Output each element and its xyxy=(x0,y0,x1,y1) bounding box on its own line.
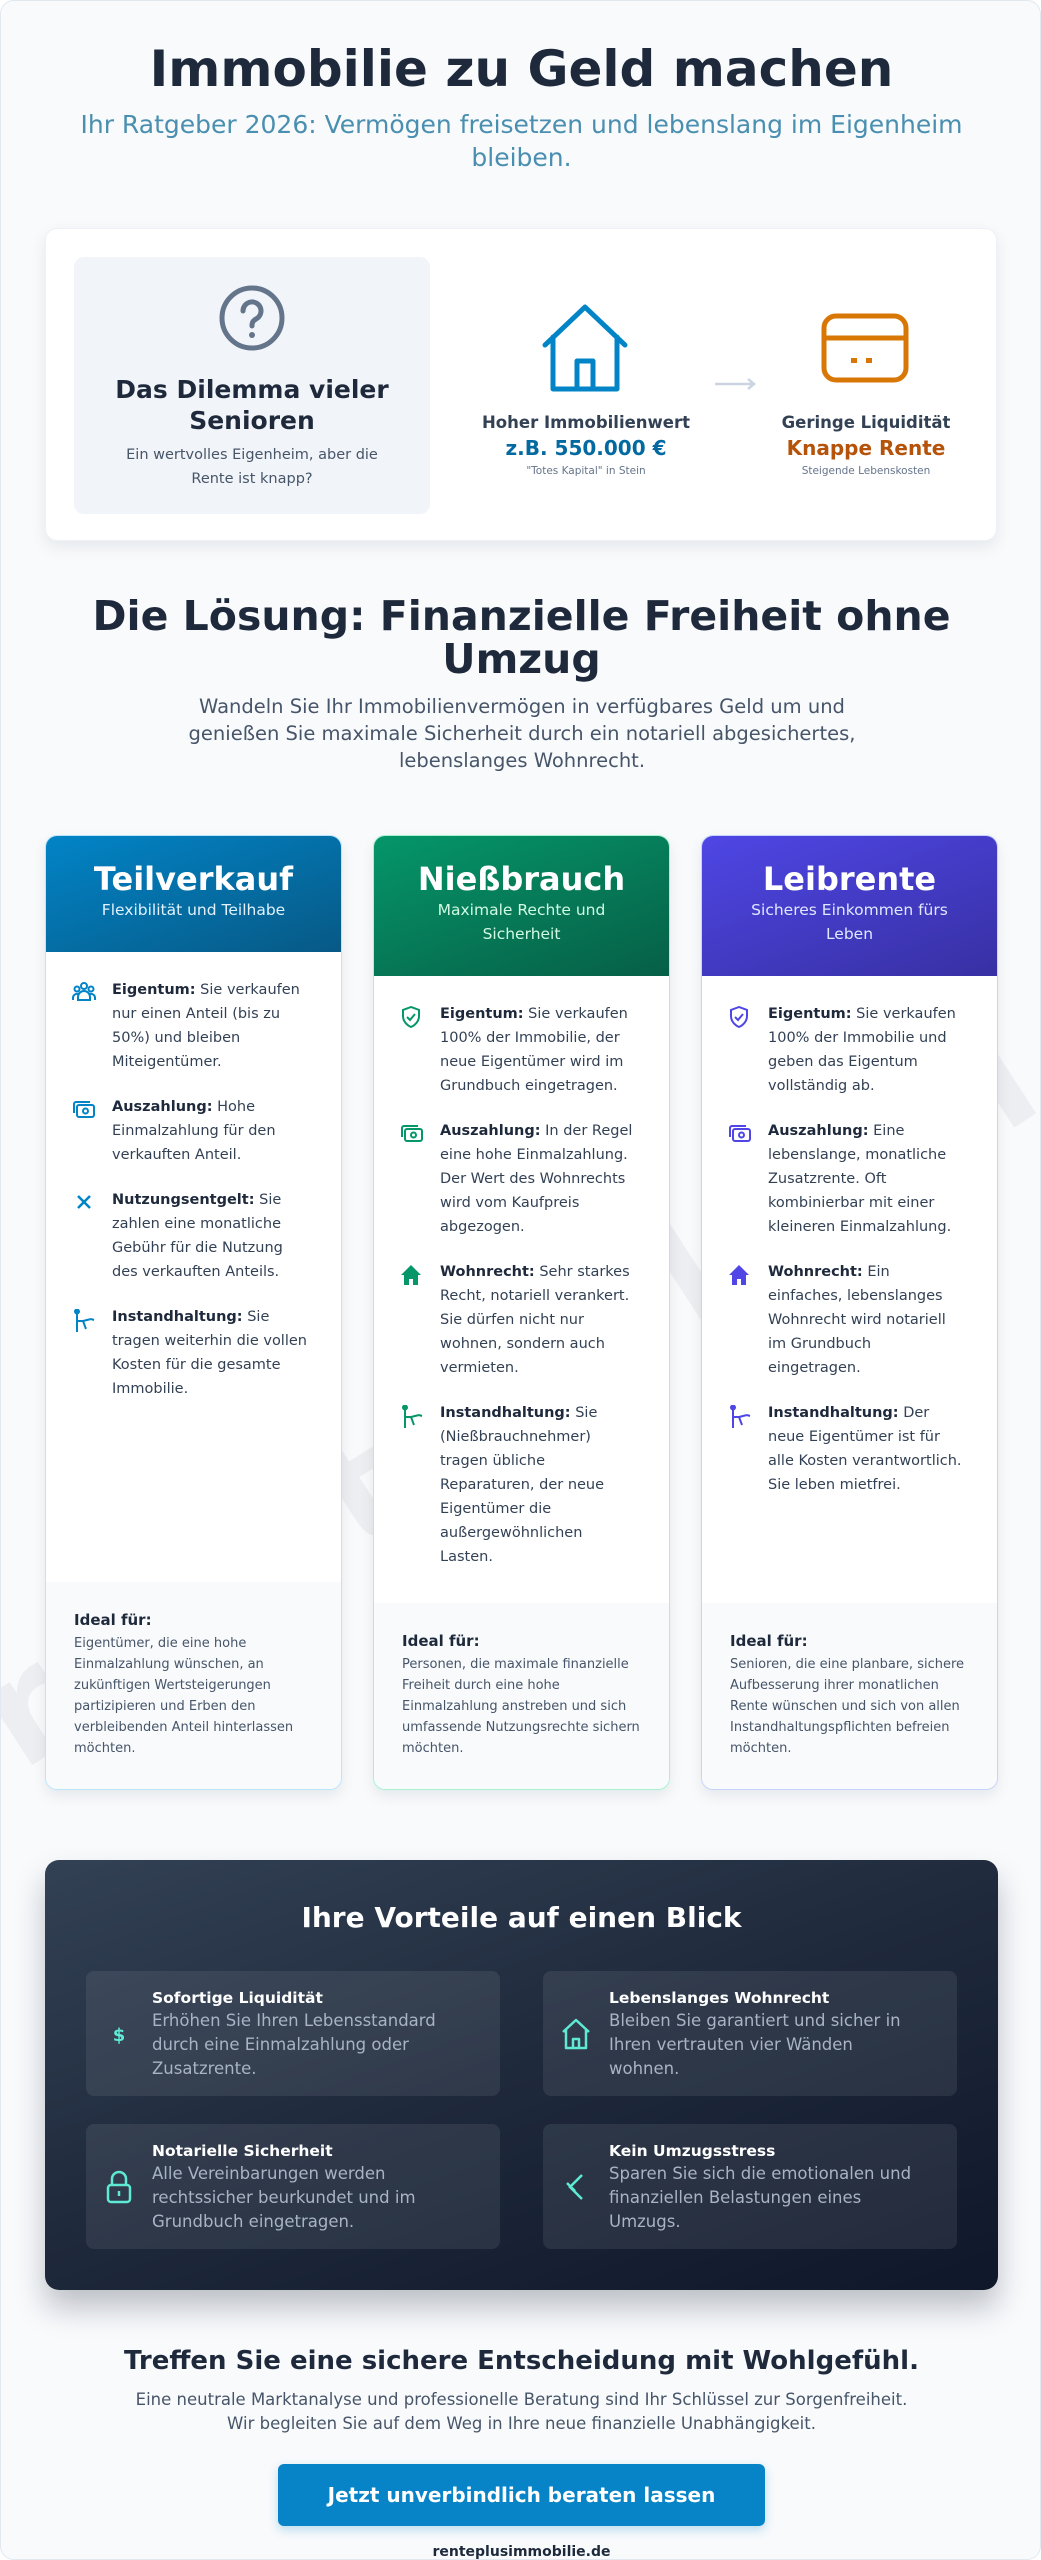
header: Leibrente: Leibrente xyxy=(763,860,936,898)
liquidity label xyxy=(782,413,950,477)
house label: z.B. 550.000 € xyxy=(505,436,666,460)
solution heading: Die Lösung: Finanzielle Freiheit ohne Umzug xyxy=(92,592,951,683)
house label xyxy=(482,413,690,477)
icon: card xyxy=(822,314,908,382)
item: Auszahlung: Auszahlung: In der Regel eine hohe Einmalzahlung. Der Wert des Wohnrechts wird vom Kaufpreis abgezogen. xyxy=(440,1123,632,1235)
item: Auszahlung: Auszahlung: Hohe Einmalzahlung für den verkauften Anteil. xyxy=(112,1099,276,1163)
advantage: Sicherheit: Notarielle Sicherheit xyxy=(152,2142,333,2160)
panel: Teilverkauf xyxy=(45,835,342,1790)
button: CTA xyxy=(278,2464,765,2526)
header: Teilverkauf xyxy=(46,836,341,952)
house label: "Totes Kapital" in Stein xyxy=(526,465,646,477)
liquidity label: Knappe Rente xyxy=(787,436,945,460)
closing text xyxy=(136,2390,907,2433)
advantage: Umzug: Kein Umzugsstress xyxy=(609,2142,775,2160)
advantage: Sicherheit: Alle Vereinbarungen werden rechtssicher beurkundet und im Grundbuch eingetragen. xyxy=(152,2164,416,2230)
advantages heading: Ihre Vorteile auf einen Blick xyxy=(301,1901,742,1934)
header: Teilverkauf: Teilverkauf xyxy=(94,860,293,898)
closing text: Wir begleiten Sie auf dem Weg in Ihre neue finanzielle Unabhängigkeit. xyxy=(227,2414,816,2433)
ideal: Teilverkauf xyxy=(46,1582,341,1789)
advantage: Liquidität xyxy=(86,1971,500,2096)
dilemma text: Ein wertvolles Eigenheim, aber die Rente ist knapp? xyxy=(126,447,378,487)
title: Immobilie zu Geld machen xyxy=(150,40,893,98)
header: Leibrente: Sicheres Einkommen fürs Leben xyxy=(751,901,948,943)
item: Instandhaltung: Instandhaltung: Der neue Eigentümer ist für alle Kosten verantwortlich. Sie leben mietfrei. xyxy=(768,1405,962,1493)
item: Eigentum: Eigentum: Sie verkaufen 100% der Immobilie, der neue Eigentümer wird im Grundbuch eingetragen. xyxy=(440,1006,628,1094)
item: Nutzungsentgelt: Nutzungsentgelt: Sie zahlen eine monatliche Gebühr für die Nutzung des verkauften Anteils. xyxy=(112,1192,283,1280)
panel: Nießbrauch xyxy=(373,835,670,1790)
solution text: Wandeln Sie Ihr Immobilienvermögen in verfügbares Geld um und genießen Sie maximale Sicherheit durch ein notariell abgesichertes, lebenslanges Wohnrecht. xyxy=(189,695,855,772)
item: Eigentum: Eigentum: Sie verkaufen 100% der Immobilie und geben das Eigentum vollständig ab. xyxy=(768,1006,956,1094)
advantage: Liquidität: $ xyxy=(113,2024,125,2046)
advantage: Sicherheit xyxy=(86,2124,500,2249)
ideal: Nießbrauch: Personen, die maximale finanzielle Freiheit durch eine hohe Einmalzahlung anstreben und sich umfassende Nutzungsrechte sichern möchten. xyxy=(402,1657,640,1756)
ideal: Leibrente: Ideal für: xyxy=(730,1632,808,1650)
house label: Hoher Immobilienwert xyxy=(482,413,690,432)
item: Wohnrecht: Wohnrecht: Sehr starkes Recht, notariell verankert. Sie dürfen nicht nur wohnen, sondern auch vermieten. xyxy=(440,1264,630,1376)
dilemma heading: Das Dilemma vieler Senioren xyxy=(115,375,389,435)
liquidity label: Steigende Lebenskosten xyxy=(802,465,930,477)
ideal: Teilverkauf: Eigentümer, die eine hohe Einmalzahlung wünschen, an zukünftigen Wertsteigerungen partizipieren und Erben den verbleibenden Anteil hinterlassen möchten. xyxy=(74,1636,293,1756)
panel: Leibrente xyxy=(701,835,998,1790)
panel: advantages xyxy=(45,1860,998,2290)
ideal: Nießbrauch: Ideal für: xyxy=(402,1632,480,1650)
header: Leibrente xyxy=(702,836,997,976)
button: CTA: Jetzt unverbindlich beraten lassen xyxy=(328,2483,715,2507)
panel: dilemma xyxy=(45,228,997,541)
header: Teilverkauf: Flexibilität und Teilhabe xyxy=(102,901,285,919)
ideal: Nießbrauch xyxy=(374,1603,669,1789)
advantage: Liquidität: Erhöhen Sie Ihren Lebensstandard durch eine Einmalzahlung oder Zusatzrente. xyxy=(152,2010,436,2078)
header: Nießbrauch xyxy=(374,836,669,976)
item: Eigentum: Eigentum: Sie verkaufen nur einen Anteil (bis zu 50%) und bleiben Miteigentümer. xyxy=(112,982,300,1070)
advantage: Liquidität: Sofortige Liquidität xyxy=(152,1988,323,2006)
dilemma box xyxy=(74,257,430,514)
arrow xyxy=(715,378,756,390)
icon: house xyxy=(542,304,628,392)
ideal: Leibrente xyxy=(702,1603,997,1789)
header: Nießbrauch: Nießbrauch xyxy=(418,860,625,898)
header: Nießbrauch: Maximale Rechte und Sicherheit xyxy=(438,901,605,943)
ideal: Teilverkauf: Ideal für: xyxy=(74,1611,152,1629)
ideal: Leibrente: Senioren, die eine planbare, sichere Aufbesserung ihrer monatlichen Rente wünschen und sich von allen Instandhaltungspflichten befreien möchten. xyxy=(730,1657,964,1756)
icon: question xyxy=(220,286,284,350)
closing text: Eine neutrale Marktanalyse und professionelle Beratung sind Ihr Schlüssel zur Sorgenfreiheit. xyxy=(136,2390,907,2409)
footer url: renteplusimmobilie.de xyxy=(432,2544,610,2560)
liquidity label: Geringe Liquidität xyxy=(782,413,950,432)
item: Wohnrecht: Wohnrecht: Ein einfaches, lebenslanges Wohnrecht wird notariell im Grundbuch eingetragen. xyxy=(768,1264,946,1376)
closing heading: Treffen Sie eine sichere Entscheidung mit Wohlgefühl. xyxy=(124,2346,919,2376)
item: Instandhaltung: Instandhaltung: Sie tragen weiterhin die vollen Kosten für die gesamte Immobilie. xyxy=(112,1309,307,1397)
advantage: Umzug: Sparen Sie sich die emotionalen und finanziellen Belastungen eines Umzugs. xyxy=(609,2164,911,2230)
item: Auszahlung: Auszahlung: Eine lebenslange, monatliche Zusatzrente. Oft kombinierbar mit einer kleineren Einmalzahlung. xyxy=(768,1123,951,1235)
subtitle: Ihr Ratgeber 2026: Vermögen freisetzen und lebenslang im Eigenheim bleiben. xyxy=(80,110,963,172)
advantage: Wohnrecht: Lebenslanges Wohnrecht xyxy=(609,1988,829,2006)
advantage: Wohnrecht xyxy=(543,1971,957,2096)
item: Instandhaltung: Instandhaltung: Sie (Nießbrauchnehmer) tragen übliche Reparaturen, der neue Eigentümer die außergewöhnlichen Lasten. xyxy=(440,1405,604,1565)
advantage: Wohnrecht: Bleiben Sie garantiert und sicher in Ihren vertrauten vier Wänden wohnen. xyxy=(609,2010,901,2078)
advantage: Umzug xyxy=(543,2124,957,2249)
